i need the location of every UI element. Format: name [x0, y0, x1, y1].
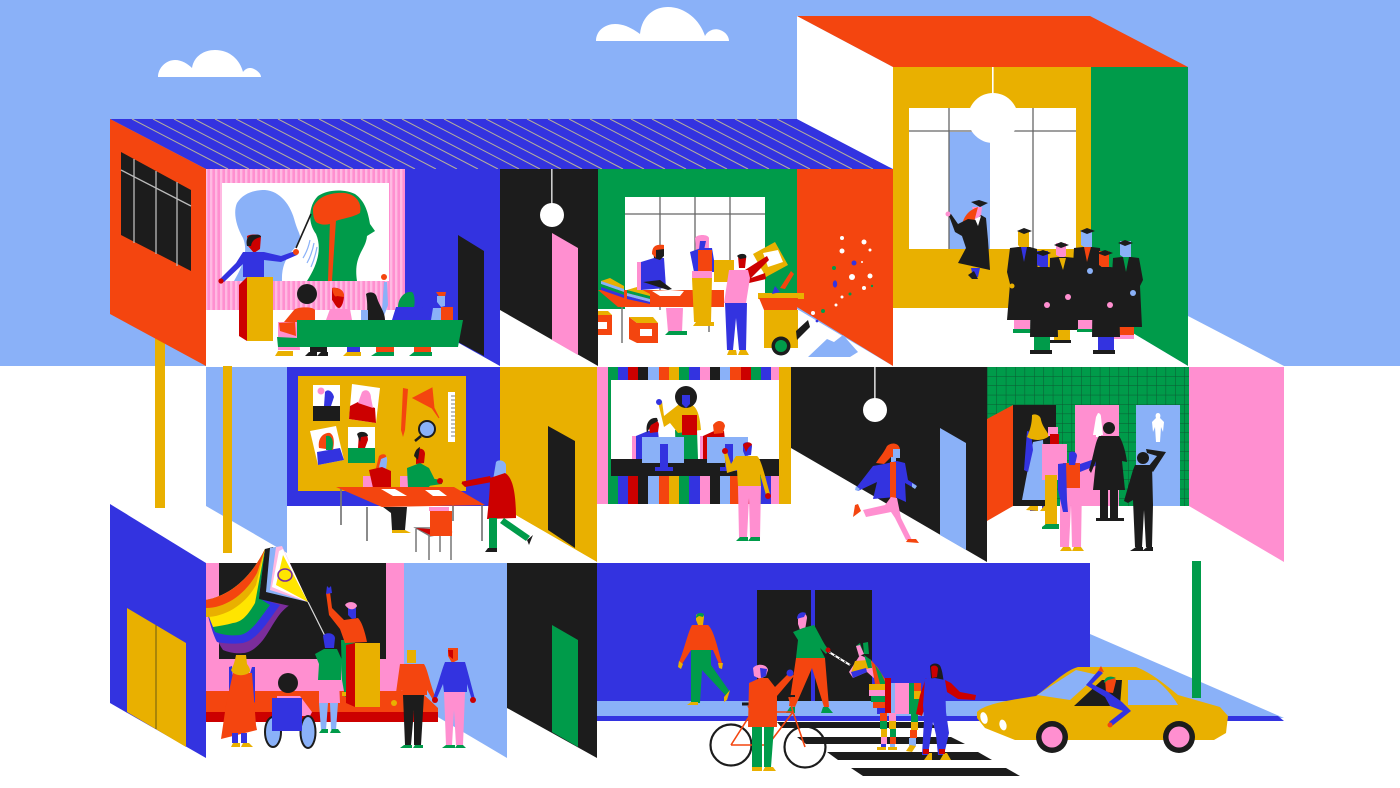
rubbish pile [808, 335, 858, 357]
green bench [277, 320, 463, 347]
standing teacher [656, 386, 701, 459]
cyclist [748, 665, 794, 771]
zebra legs [880, 713, 918, 748]
panel: pale blue side wall [206, 366, 287, 553]
white wall [797, 16, 893, 169]
zebra ears [856, 642, 869, 656]
graduate four [1070, 228, 1104, 332]
book stripes [597, 367, 791, 504]
table [598, 290, 724, 343]
ruler [448, 392, 455, 442]
couple holding hands [391, 648, 476, 748]
zebra body [869, 684, 885, 690]
orange outer wall with window [110, 119, 206, 366]
silhouette man scratching head [1124, 449, 1166, 551]
pink restroom door [1075, 405, 1119, 506]
woman with blonde hair [1022, 414, 1050, 511]
stage [206, 691, 438, 722]
bulletin board [298, 376, 466, 491]
rainbow zebra [849, 642, 921, 752]
stacks of books [601, 278, 650, 304]
zebra neck [871, 660, 888, 684]
window [625, 197, 765, 310]
crosswalk [777, 722, 1020, 776]
panel: recycling library room [598, 169, 893, 366]
graduate six [1109, 240, 1143, 339]
recycling bin [758, 271, 810, 356]
window and desk [611, 380, 779, 476]
person reading at table [637, 245, 687, 335]
panel: auditorium stage [206, 546, 507, 758]
sky [0, 0, 1400, 366]
panel: street front [597, 561, 1284, 776]
storage boxes [598, 311, 658, 343]
graduate five [1092, 250, 1120, 354]
podium [239, 277, 273, 341]
cloud left [158, 50, 261, 77]
tiled wall [987, 367, 1189, 506]
support pillars [155, 336, 165, 508]
walking man [678, 613, 730, 705]
cloud right [596, 7, 729, 41]
lecturer [218, 214, 311, 284]
blue side wall with door [405, 169, 500, 366]
orange wall with confetti [797, 169, 893, 366]
white terrace triangle [1188, 316, 1284, 366]
bicycle [710, 696, 826, 768]
person in pink jumper [1042, 427, 1067, 529]
window [909, 108, 1076, 249]
pride flag [206, 546, 325, 653]
person standing behind [690, 235, 716, 326]
red roof [797, 16, 1188, 67]
person pointing [1058, 451, 1120, 551]
yellow car with driver [977, 666, 1228, 753]
yellow corridor wall [500, 367, 597, 562]
pale blue wall [404, 563, 507, 758]
graduate three [1048, 242, 1079, 343]
striped pink wall [206, 169, 405, 310]
panel: restroom [987, 367, 1284, 562]
green lamp post [1192, 561, 1201, 698]
graduates group [1007, 228, 1143, 354]
roof [110, 119, 893, 169]
driver waving [1086, 666, 1131, 728]
yellow wall [893, 67, 1091, 308]
floor [893, 308, 1188, 366]
triangle tool [413, 388, 439, 418]
seated students with monitors [632, 418, 748, 471]
wheelchair user [265, 673, 316, 748]
podium [346, 643, 380, 707]
floor [206, 310, 500, 366]
panel: corridor with runner [791, 367, 987, 562]
woman in orange dress [221, 655, 257, 747]
panel: black corridor [507, 563, 597, 758]
open door [987, 405, 1056, 521]
woman in blue bodysuit [916, 664, 976, 760]
seated colleagues [363, 447, 443, 488]
speaker behind podium [326, 586, 367, 697]
blue restroom door [1136, 405, 1180, 506]
floor [597, 504, 791, 562]
entrance doors [757, 590, 872, 701]
graduate one [1007, 228, 1039, 333]
legs under table [383, 507, 411, 533]
panel: meeting room [287, 367, 597, 562]
ground [0, 366, 1400, 788]
panel: graduation hall [797, 16, 1188, 366]
orange chair [416, 507, 452, 560]
panel: corridor with lamp [500, 169, 598, 366]
person holding flag [315, 633, 342, 733]
person handing box [714, 242, 788, 355]
zebra hooves [877, 745, 916, 752]
pendant lamp [968, 67, 1018, 143]
green side wall [1091, 67, 1188, 366]
blue wall [597, 563, 1090, 701]
panel: blue outer wall with doors [110, 504, 206, 758]
graduate sitting on window [946, 200, 990, 279]
meeting table [336, 487, 485, 541]
standing student [722, 442, 771, 541]
pinned portraits [310, 384, 380, 465]
seated students [275, 274, 453, 356]
silhouette woman [1089, 422, 1127, 521]
woman walking in hijab [456, 460, 533, 552]
running woman [853, 443, 919, 543]
projection screen with heads [222, 183, 389, 281]
panel: computer room with book wall [597, 367, 791, 562]
panel: lecture hall [110, 119, 893, 366]
graduate two [1030, 250, 1058, 354]
pink outer wall [1189, 367, 1284, 562]
zebra head [849, 655, 876, 680]
dog walker [786, 612, 850, 713]
magnifier [415, 421, 435, 441]
pencil [401, 388, 408, 437]
pavement [597, 634, 1284, 721]
